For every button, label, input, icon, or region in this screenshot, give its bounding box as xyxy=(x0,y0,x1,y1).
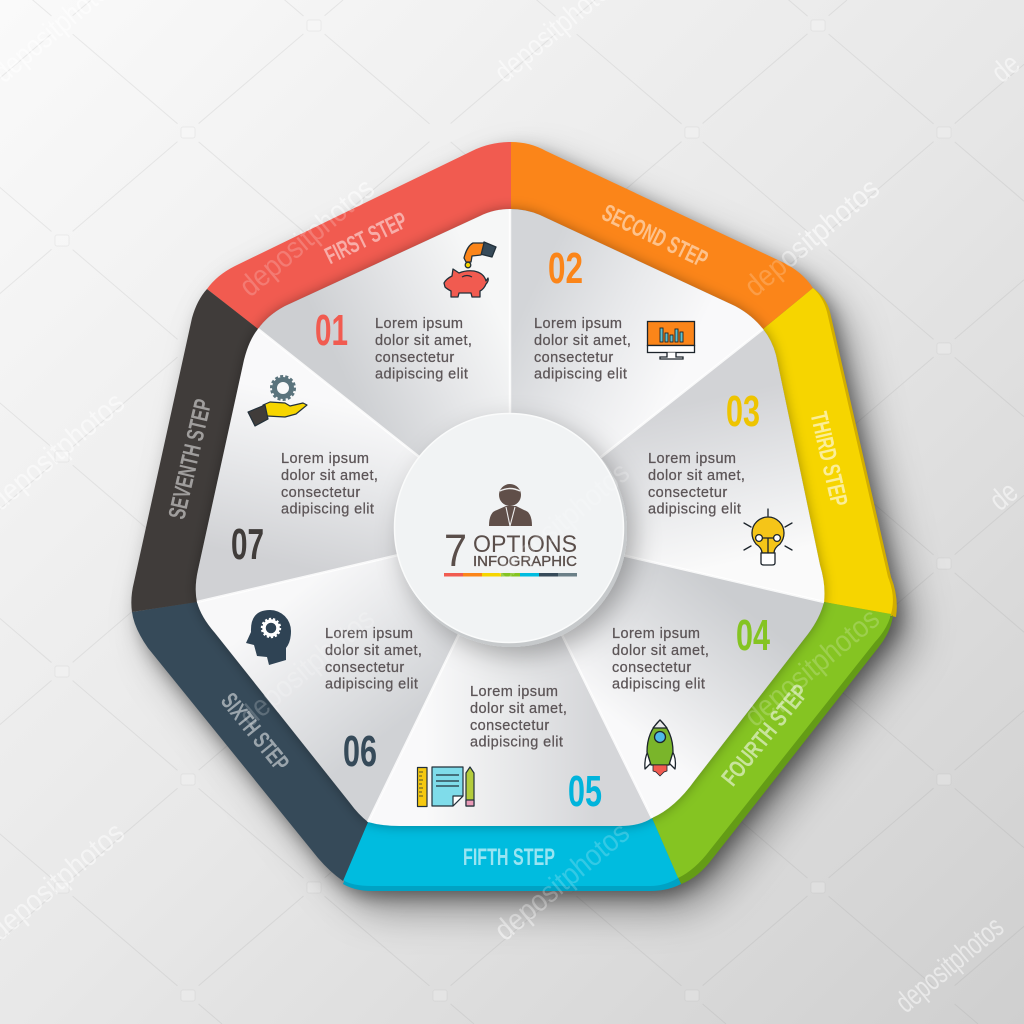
body text blocks: consectetur xyxy=(375,350,455,366)
band: sixth step xyxy=(132,602,368,881)
band: first step xyxy=(207,142,511,329)
icon: rocket xyxy=(645,720,675,776)
body text blocks: consectetur xyxy=(534,350,614,366)
step labels xyxy=(164,199,852,871)
step labels: FIFTH STEP xyxy=(463,844,555,871)
title: INFOGRAPHIC xyxy=(473,553,577,570)
watermark over the artwork: depositphotos xyxy=(233,602,381,733)
watermark over the artwork xyxy=(233,172,886,947)
body text blocks: dolor sit amet, xyxy=(281,468,378,484)
watermark over the artwork: depositphotos xyxy=(488,816,636,947)
icon: person xyxy=(489,484,532,526)
body text blocks: Lorem ipsum xyxy=(375,316,463,332)
body text blocks: dolor sit amet, xyxy=(470,701,567,717)
body text blocks: consectetur xyxy=(612,660,692,676)
step labels: FIRST STEP xyxy=(321,207,412,270)
step numbers xyxy=(231,244,770,816)
step labels: THIRD STEP xyxy=(805,409,852,509)
step numbers: 07 xyxy=(231,520,264,569)
icon: monitor xyxy=(648,322,694,359)
step numbers: 06 xyxy=(343,727,377,776)
icon: head with gear xyxy=(246,610,291,665)
body text blocks: adipiscing elit xyxy=(534,367,627,383)
body text blocks: adipiscing elit xyxy=(612,677,705,693)
body text blocks: Lorem ipsum xyxy=(281,451,369,467)
body text blocks: Lorem ipsum xyxy=(325,626,413,642)
step numbers: 02 xyxy=(548,244,583,293)
center circle xyxy=(394,414,627,647)
body text blocks: consectetur xyxy=(325,660,405,676)
watermark pattern: depositphotos xyxy=(488,816,636,947)
title: OPTIONS xyxy=(473,531,577,558)
body text blocks: Lorem ipsum xyxy=(470,684,558,700)
band: fifth step xyxy=(343,818,678,886)
title: 7 xyxy=(444,525,467,576)
step labels: SIXTH STEP xyxy=(215,688,294,777)
step numbers: 03 xyxy=(726,387,760,436)
body text blocks: dolor sit amet, xyxy=(534,333,631,349)
body text blocks: dolor sit amet, xyxy=(612,643,709,659)
band: seventh step xyxy=(131,289,258,612)
icon: piggy bank xyxy=(444,242,496,297)
body text blocks: adipiscing elit xyxy=(648,502,741,518)
title rainbow bar xyxy=(444,573,577,576)
body text blocks: consectetur xyxy=(648,485,728,501)
body text blocks: dolor sit amet, xyxy=(375,333,472,349)
3D side edges of the ring xyxy=(343,288,897,891)
step numbers: 05 xyxy=(568,767,602,816)
watermark over the artwork: depositphotos xyxy=(738,172,886,303)
body text blocks: consectetur xyxy=(470,718,550,734)
watermark pattern: depositphotos xyxy=(233,172,381,303)
band: second step xyxy=(511,142,813,329)
body text blocks: adipiscing elit xyxy=(325,677,418,693)
step numbers: 01 xyxy=(315,306,348,355)
body text blocks: Lorem ipsum xyxy=(534,316,622,332)
watermark pattern: depositphotos xyxy=(738,172,886,303)
icon: documents and pencil xyxy=(418,767,474,806)
inner heptagon sectors xyxy=(196,209,824,826)
body text blocks: dolor sit amet, xyxy=(325,643,422,659)
body text blocks: Lorem ipsum xyxy=(612,626,700,642)
body text blocks: adipiscing elit xyxy=(470,735,563,751)
band: fourth step xyxy=(652,602,891,878)
body text blocks: adipiscing elit xyxy=(375,367,468,383)
watermark over the artwork: depositphotos xyxy=(233,172,381,303)
body text blocks xyxy=(281,316,745,751)
step labels: FOURTH STEP xyxy=(717,679,814,791)
step labels: SEVENTH STEP xyxy=(164,397,217,522)
band: third step xyxy=(763,288,893,614)
body text blocks: Lorem ipsum xyxy=(648,451,736,467)
body text blocks: adipiscing elit xyxy=(281,502,374,518)
body text blocks: consectetur xyxy=(281,485,361,501)
soft shadow xyxy=(139,151,914,910)
step labels: SECOND STEP xyxy=(598,199,712,274)
body text blocks: dolor sit amet, xyxy=(648,468,745,484)
icon: light bulb xyxy=(744,509,792,565)
icon: hand holding gear xyxy=(248,376,307,426)
title xyxy=(444,525,577,576)
watermark over the artwork: depositphotos xyxy=(488,456,636,587)
step numbers: 04 xyxy=(736,611,770,660)
watermark over the artwork: depositphotos xyxy=(738,602,886,733)
